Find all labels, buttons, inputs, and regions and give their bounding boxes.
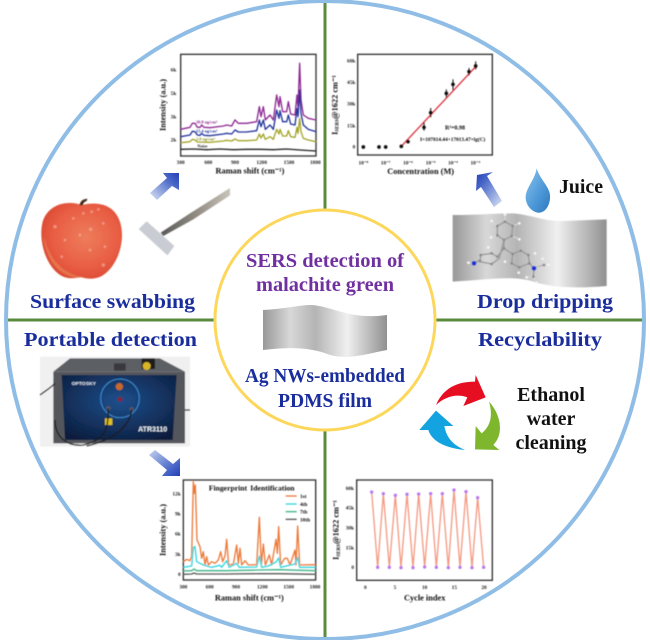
legend: 1st [300,494,307,500]
chart: calibration curve: 10⁻⁵ [426,161,436,167]
blue arrow [419,411,465,450]
line: 4th [183,547,316,567]
chart: SERS spectra by surface density: 900 [231,160,239,166]
chart: calibration curve: I=107814.44+17013.47×lg(C) [420,136,486,143]
arrow: device to fingerprint spectrum [149,450,180,476]
chart: fingerprint identification spectra: 1200 [257,585,268,591]
label: Ethanol water cleaning: cleaning [515,432,587,454]
heading: Recyclability: Recyclability [478,329,602,351]
chart: recyclability cycles: 15 [452,585,457,591]
chart: SERS spectra by surface density: 5k [171,91,176,97]
chart: SERS spectra by surface density: 1500 [284,160,295,166]
yellow connector [142,358,155,369]
label: Ethanol water cleaning [515,384,587,454]
legend: 4th [300,502,307,508]
chart: fingerprint identification spectra: 9k [175,512,181,518]
legend: 10th [300,517,310,523]
chart: recyclability cycles: @1622 cm⁻¹ [332,500,341,544]
line: purple spectrum [181,63,316,129]
icon: apple [41,199,122,279]
central yellow circle [215,210,435,430]
chart: SERS spectra by surface density: 3k [171,114,176,120]
chart: calibration curve: Concentration (M) [387,167,454,176]
center heading: malachite green: malachite green [256,274,394,296]
line: blue spectrum [181,90,316,137]
label: Ethanol water cleaning: Ethanol [517,384,585,406]
chart: SERS spectra by surface density: Raman shift (cm⁻¹) [216,166,285,175]
chart: recyclability cycles: 45k [346,506,354,512]
chart: calibration curve: 0 [353,145,356,151]
device screen [62,375,177,440]
icon: recycling arrows [419,375,500,450]
icon: swab film [139,222,174,255]
chart: fingerprint identification spectra: Fingerprint Identification [209,484,295,493]
line: noise baseline [181,149,316,151]
fit line [401,67,476,146]
chart: SERS spectra by surface density [158,54,321,175]
chart: calibration curve: 10⁻⁴ [448,161,458,167]
chart: calibration curve: 10⁻⁶ [403,161,413,167]
legend [286,494,310,523]
chart: calibration curve: 10⁻⁸ [358,161,369,167]
chart: SERS spectra by surface density: 6k [171,68,176,74]
chart: recyclability cycles: SERS [337,544,342,557]
chart: fingerprint identification spectra: 900 [232,585,240,591]
red arrow [436,375,486,406]
icon: tweezers handle [161,188,230,236]
chart: calibration curve: 60k [347,58,355,64]
chart: SERS spectra by surface density: 1800 [310,160,321,166]
chart: calibration curve: SERS [336,119,341,132]
data markers [370,488,485,569]
chart: calibration curve: R²=0.98 [445,125,465,131]
heading: Portable detection: Portable detection [24,329,197,351]
arrow: swabbing to spectrum [150,173,179,200]
film with malachite green molecule [453,213,607,287]
chart: fingerprint identification spectra [158,480,321,602]
molecule [467,213,550,284]
center label: Ag NWs-embedded PDMS film [245,365,405,412]
chart: fingerprint identification spectra: 3k [175,552,181,558]
chart: fingerprint identification spectra: 1800 [310,585,321,591]
cables [40,383,190,446]
photo: portable Raman spectrometer [40,357,190,447]
chart: recyclability cycles: 0 [351,565,354,571]
center film image [263,305,387,357]
heading: Drop dripping: Drop dripping [477,291,613,313]
chart: calibration curve: I [330,132,339,135]
film sheet [453,213,607,287]
chart: SERS spectra by surface density: 30.8 ug/cm² [196,119,218,124]
device body [53,372,185,443]
chart: fingerprint identification spectra: Intensity (a.u.) [158,504,167,556]
chart: recyclability cycles: 60k [346,486,354,492]
center label: Ag NWs-embedded PDMS film: PDMS film [278,390,372,412]
chart: calibration curve: 30k [347,102,355,108]
chart: recyclability cycles: 15k [346,545,354,551]
chart: SERS spectra by surface density: Noise [197,143,208,148]
icon: apple and tweezers with film [41,188,230,279]
chart: calibration curve: 45k [347,80,355,86]
chart: fingerprint identification spectra: 6k [175,532,181,538]
chart: SERS spectra by surface density: 15.4 ug/cm² [196,128,218,133]
chart: recyclability cycles: I [332,557,341,560]
line: 10th [183,573,316,574]
chart: recyclability cycles: 20 [481,585,487,591]
chart: recyclability cycles [332,480,492,603]
line: olive spectrum [181,118,316,143]
chart: SERS spectra by surface density: Intensity (a.u.) [158,79,167,131]
center heading: SERS detection: SERS detection of [246,250,404,272]
chart: fingerprint identification spectra: 1500 [283,585,294,591]
icon: juice drop [526,168,550,213]
chart: calibration curve [330,54,492,176]
line: 1st [183,482,316,565]
center label: Ag NWs-embedded PDMS film: Ag NWs-embedded [245,365,405,387]
line: cycle zigzag [372,490,484,568]
photo: portable Raman spectrometer: OPTOSKY [72,381,97,387]
label: Juice: Juice [559,176,603,198]
chart: SERS spectra by surface density: 1200 [256,160,267,166]
chart: recyclability cycles: 10 [422,585,428,591]
chart: calibration curve: @1622 cm⁻¹ [330,75,339,119]
chart: fingerprint identification spectra: 600 [206,585,214,591]
heading: Surface swabbing: Surface swabbing [30,291,195,313]
chart: recyclability cycles: 5 [394,585,397,591]
chart: SERS spectra by surface density: 600 [204,160,213,166]
legend: 7th [300,510,307,516]
chart: calibration curve: 15k [347,123,355,129]
chart: SERS spectra by surface density: 2k [171,138,176,144]
label: Ethanol water cleaning: water [527,408,576,430]
chart: fingerprint identification spectra: Raman shift (cm⁻¹) [215,593,284,602]
chart: calibration curve: 10⁻³ [470,161,481,167]
chart: SERS spectra by surface density: 3.8 ug/cm² [196,136,216,141]
data points [362,61,477,148]
device lid [53,358,185,372]
chart: recyclability cycles: 0 [364,585,367,591]
photo: portable Raman spectrometer: ATR3110 [138,426,167,433]
chart: fingerprint identification spectra: 300 [179,585,188,591]
chart: recyclability cycles: Cycle index [404,594,446,603]
line: 7th [183,569,316,571]
chart: fingerprint identification spectra: 12k [172,492,181,498]
arrow: dripping to calibration [476,172,502,207]
chart: recyclability cycles: 30k [346,526,354,532]
chart: fingerprint identification spectra: 0 [178,572,181,578]
chart: SERS spectra by surface density: 300 [177,160,185,166]
green arrow [475,402,500,450]
chart: calibration curve: 10⁻⁷ [381,161,391,167]
